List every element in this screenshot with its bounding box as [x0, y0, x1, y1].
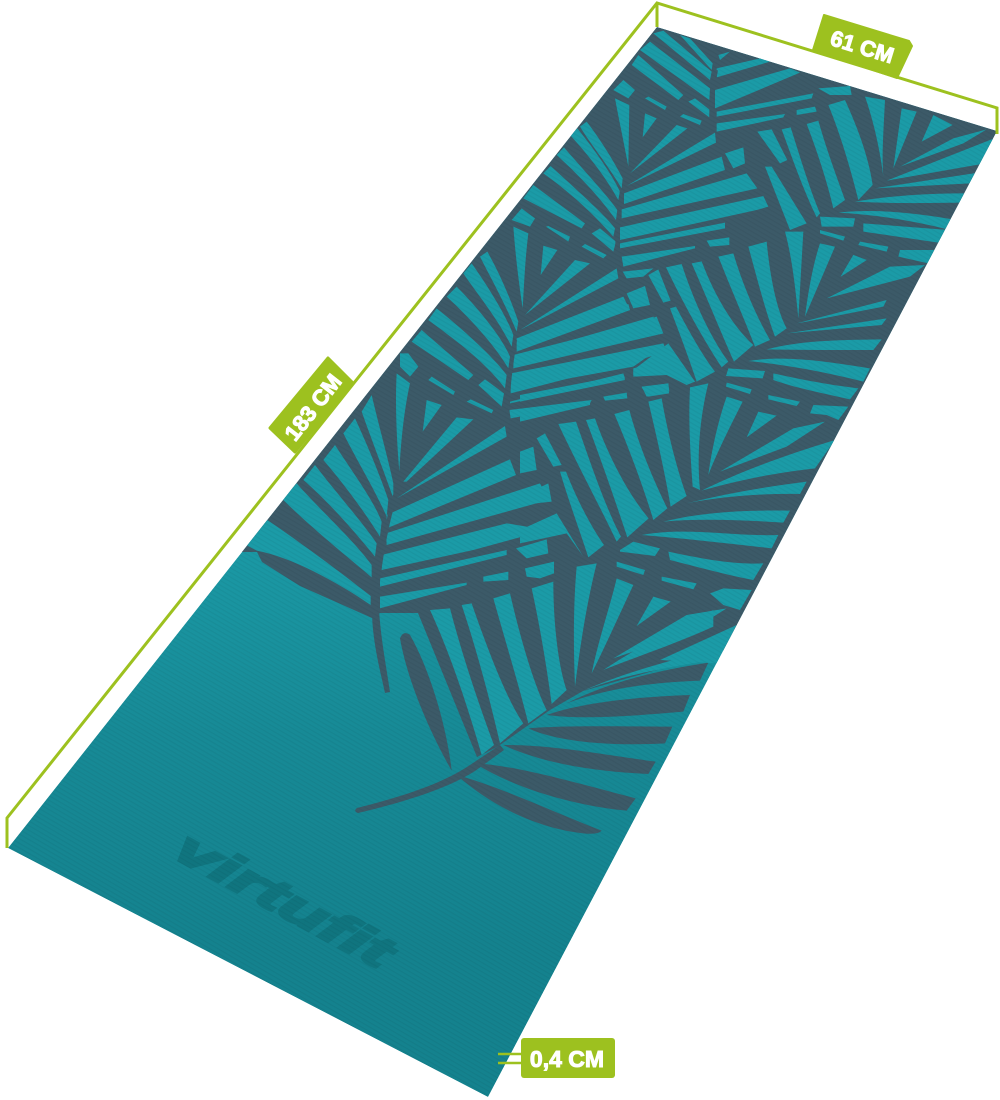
teal stripes: second frond	[400, 122, 753, 418]
label: 183 cm	[270, 358, 352, 452]
label: 183 cm: 183 CM	[280, 369, 347, 445]
dimension line: length and width bracket	[7, 3, 997, 848]
frond tails and lower leaflets	[355, 610, 708, 834]
label: 0,4 cm	[521, 1038, 615, 1078]
dark print base	[230, 27, 997, 757]
teal stripes: right column fronds	[520, 232, 887, 663]
teal stripes: bottom frond left side	[430, 562, 713, 755]
teal stripes: left frond	[230, 373, 548, 608]
thickness leader lines	[498, 1054, 522, 1063]
label: 61 cm	[813, 15, 912, 78]
dimension tick at mat apex	[656, 3, 658, 27]
label: 61 cm: 61 CM	[828, 25, 897, 68]
embossed brand name: virtufit	[163, 822, 408, 980]
teal stripes: top frond	[613, 31, 997, 298]
label: 0,4 cm: 0,4 CM	[530, 1046, 604, 1072]
stems	[375, 70, 716, 612]
